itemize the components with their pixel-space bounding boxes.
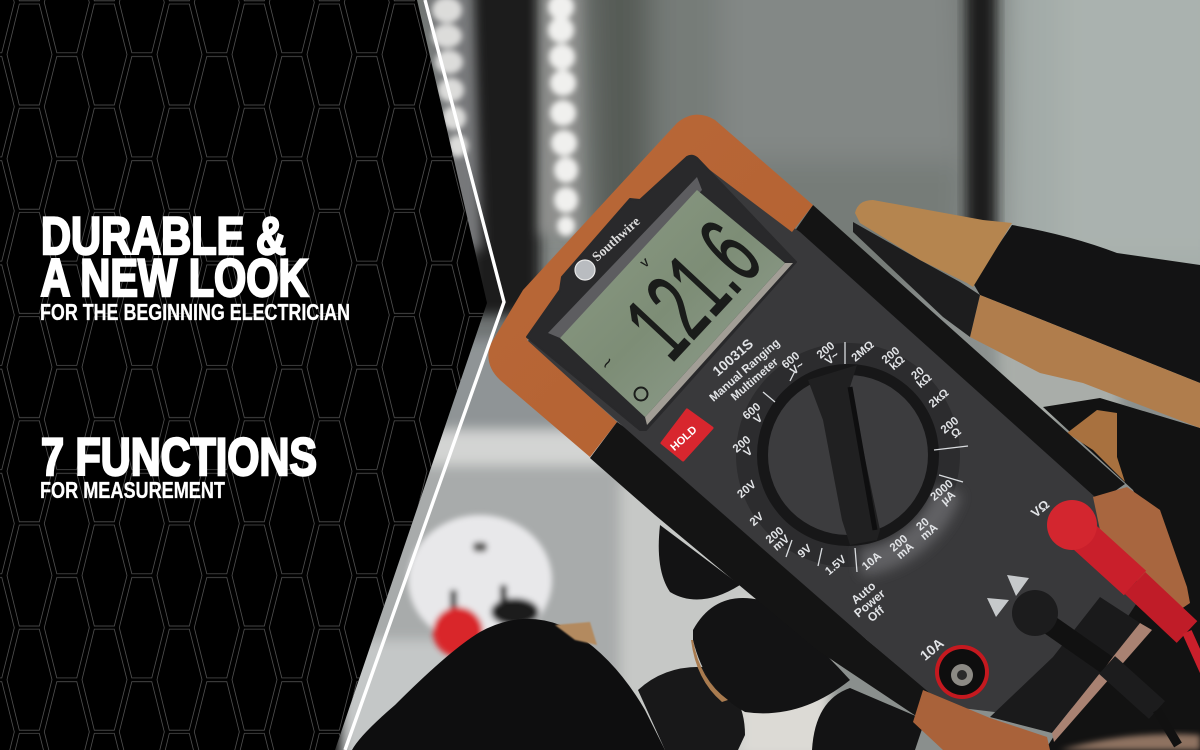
dial labels: mA	[895, 541, 916, 562]
dial labels: 9V	[796, 542, 815, 561]
blurred lower scene	[340, 315, 1120, 750]
heading: durable: A NEW LOOK	[40, 249, 308, 308]
dial label ring	[736, 343, 960, 567]
dial labels: kΩ	[915, 372, 934, 391]
dial labels: V	[742, 445, 756, 459]
dial labels: 2000	[928, 478, 956, 504]
right lower glove	[1045, 540, 1200, 750]
auto power off: Power	[851, 586, 888, 620]
red plug	[1047, 500, 1200, 672]
warning triangles	[987, 575, 1029, 617]
dial labels: mV	[771, 533, 792, 554]
dial labels: 200	[939, 415, 961, 436]
model text: Manual Ranging	[708, 337, 782, 404]
bezel	[527, 156, 796, 430]
dial dividers	[763, 342, 968, 572]
dial labels: 600	[780, 350, 802, 371]
multimeter	[488, 115, 1200, 750]
dial labels: 2V	[748, 510, 767, 529]
port 10A label: 10A	[917, 635, 947, 664]
dial labels: 10A	[860, 550, 884, 573]
upper rail	[792, 205, 1125, 505]
dial labels: Ω	[949, 426, 964, 441]
brand logo	[575, 260, 595, 280]
white chevron line	[345, 0, 504, 750]
port label: VΩ	[1028, 497, 1052, 520]
dial labels: 600	[741, 401, 763, 422]
dial labels: V~	[788, 359, 807, 378]
dial labels: µA	[939, 489, 958, 508]
dial labels: 200	[888, 533, 910, 554]
battery bump	[990, 597, 1140, 733]
dial labels: 20V	[735, 478, 759, 501]
dial labels: 200	[764, 525, 786, 546]
lcd screen	[560, 190, 785, 417]
behind-meter finger	[659, 525, 740, 600]
lcd reading: 121.6	[605, 202, 781, 379]
dial labels: 20	[914, 516, 932, 533]
auto power off: Off	[865, 602, 888, 625]
black mesh	[973, 225, 1200, 383]
model text: Multimeter	[729, 356, 781, 403]
dial labels: 20	[909, 365, 927, 382]
brand: Southwire	[589, 214, 643, 264]
model text: 10031S	[709, 335, 756, 379]
conduit left	[425, 0, 482, 250]
dial labels: V~	[823, 349, 842, 368]
dark column	[470, 0, 540, 330]
dial labels: 2MΩ	[850, 339, 877, 364]
tan cuff	[555, 622, 597, 645]
lcd power icon	[634, 388, 648, 400]
dial labels: 200	[815, 340, 837, 361]
finger cork edge	[691, 640, 728, 702]
10A jack	[935, 645, 989, 699]
lcd silver edge	[645, 263, 793, 425]
dial labels: 1.5V	[823, 553, 849, 578]
hold label: HOLD	[668, 424, 700, 454]
dial label ring highlight	[860, 490, 948, 562]
subheading: measurement: FOR MEASUREMENT	[40, 477, 225, 503]
glove: lower hand	[352, 525, 1200, 750]
black side panel	[0, 0, 487, 750]
tan strip	[1052, 623, 1152, 742]
orange top bumper	[488, 115, 813, 457]
dial handle	[808, 365, 880, 545]
heading: durable: DURABLE &	[41, 207, 286, 266]
ac mark: ~	[595, 353, 620, 374]
dial labels: 2kΩ	[927, 387, 951, 410]
second finger	[1043, 398, 1200, 600]
volts mark: V	[639, 256, 653, 271]
black plug	[1012, 590, 1178, 745]
photo background	[340, 0, 1200, 750]
dial labels: 200	[731, 434, 753, 455]
dial handle ridge	[850, 387, 875, 530]
tan fingertip	[855, 200, 1012, 287]
subheading: beginning electrician: FOR THE BEGINNING ELECTRICIAN	[40, 299, 350, 325]
dial labels	[731, 339, 968, 578]
palm	[352, 619, 665, 750]
tan finger patch	[1067, 410, 1125, 482]
lower rail	[590, 422, 945, 722]
dial ring	[757, 364, 939, 546]
tan strip	[970, 295, 1200, 428]
glove: upper hand	[853, 200, 1200, 600]
lcd gray band	[548, 177, 702, 338]
small finger	[638, 667, 745, 750]
heading: durable	[40, 207, 308, 308]
middle finger	[693, 598, 850, 713]
main face	[527, 155, 1165, 720]
dark fingertip	[853, 222, 980, 337]
conduit right	[540, 0, 582, 236]
orange right corner	[1093, 487, 1190, 620]
auto power off: Auto	[848, 579, 878, 607]
hold button	[662, 410, 712, 460]
hexagon pattern	[0, 0, 487, 750]
dial labels: mA	[919, 522, 940, 543]
dial labels: 200	[880, 345, 902, 366]
dial labels: kΩ	[888, 354, 907, 373]
orange bottom corner	[913, 690, 1050, 750]
dark vertical band	[966, 0, 996, 270]
heading: functions: 7 FUNCTIONS	[41, 428, 317, 487]
dial knob	[768, 375, 928, 535]
outlet	[408, 515, 552, 657]
dial labels: V	[752, 412, 766, 426]
lower finger	[812, 688, 925, 750]
